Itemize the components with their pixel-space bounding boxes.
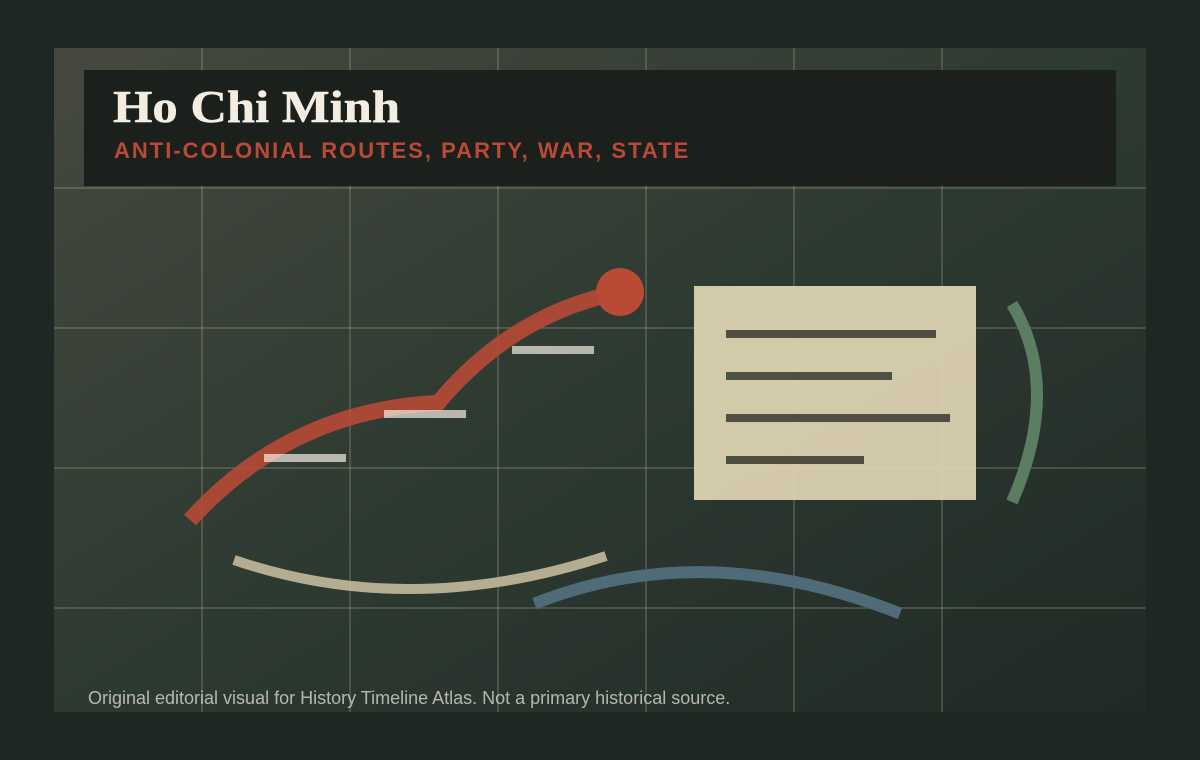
- panel: map background: [54, 48, 1146, 712]
- arc: green: [1012, 304, 1037, 502]
- title: Ho Chi Minh: [113, 81, 400, 132]
- subtitle: ANTI-COLONIAL ROUTES, PARTY, WAR, STATE: [114, 138, 690, 163]
- arc: blue: [534, 572, 900, 614]
- route: main red path with endpoint: [190, 268, 644, 520]
- panel: title banner: [84, 70, 1116, 186]
- panel: document card: [694, 286, 976, 500]
- footer note: Original editorial visual for History Timeline Atlas. Not a primary historical source.: [88, 688, 730, 708]
- arc: beige: [234, 556, 606, 589]
- route labels: placeholder bars: [264, 346, 594, 462]
